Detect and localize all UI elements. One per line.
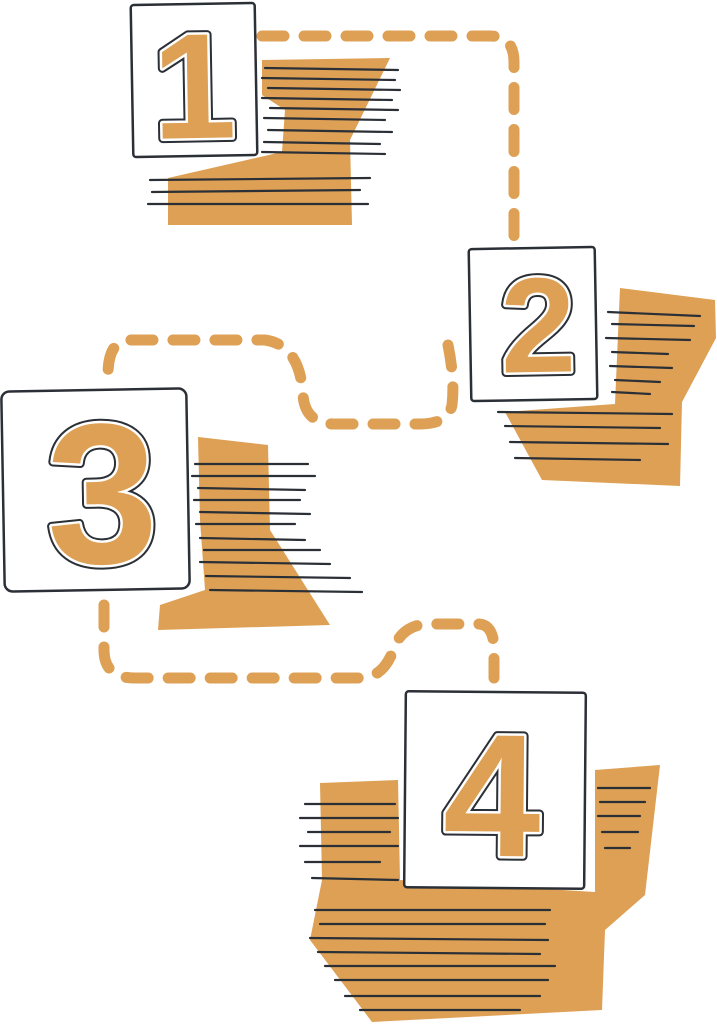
card 1 — [131, 1, 258, 171]
card 3: 3 — [45, 382, 160, 607]
text lines 2 — [498, 312, 700, 460]
orange block 4 — [310, 765, 660, 1022]
text lines 3 — [192, 464, 362, 592]
text lines 1 — [148, 68, 400, 204]
connector: 3 to 4 — [104, 605, 494, 678]
connector: 2 to 3 — [108, 340, 453, 424]
card 3 — [1, 381, 190, 608]
card 4: 4 — [442, 699, 541, 894]
step 3 — [1, 381, 362, 630]
connector: 1 to 2 — [262, 36, 514, 240]
step 4 — [300, 691, 660, 1022]
step 2 — [469, 247, 716, 486]
step 1 — [131, 1, 400, 225]
card 4: 4 — [442, 699, 541, 894]
card 1: 1 — [151, 1, 237, 171]
card 2: 2 — [499, 249, 577, 402]
card 4 — [404, 691, 586, 895]
card 2: 2 — [499, 249, 577, 402]
card 3: 3 — [45, 382, 160, 607]
card 3: 3 — [45, 382, 160, 607]
card 4: 4 — [442, 699, 541, 894]
orange block 2 — [505, 288, 716, 486]
card 1: 1 — [151, 1, 237, 171]
orange block 3 — [158, 437, 330, 630]
card 2: 2 — [499, 249, 577, 402]
card 1: 1 — [151, 1, 237, 171]
text lines 4 — [300, 788, 650, 1010]
orange block 1 — [168, 58, 390, 225]
card 2 — [469, 247, 597, 402]
